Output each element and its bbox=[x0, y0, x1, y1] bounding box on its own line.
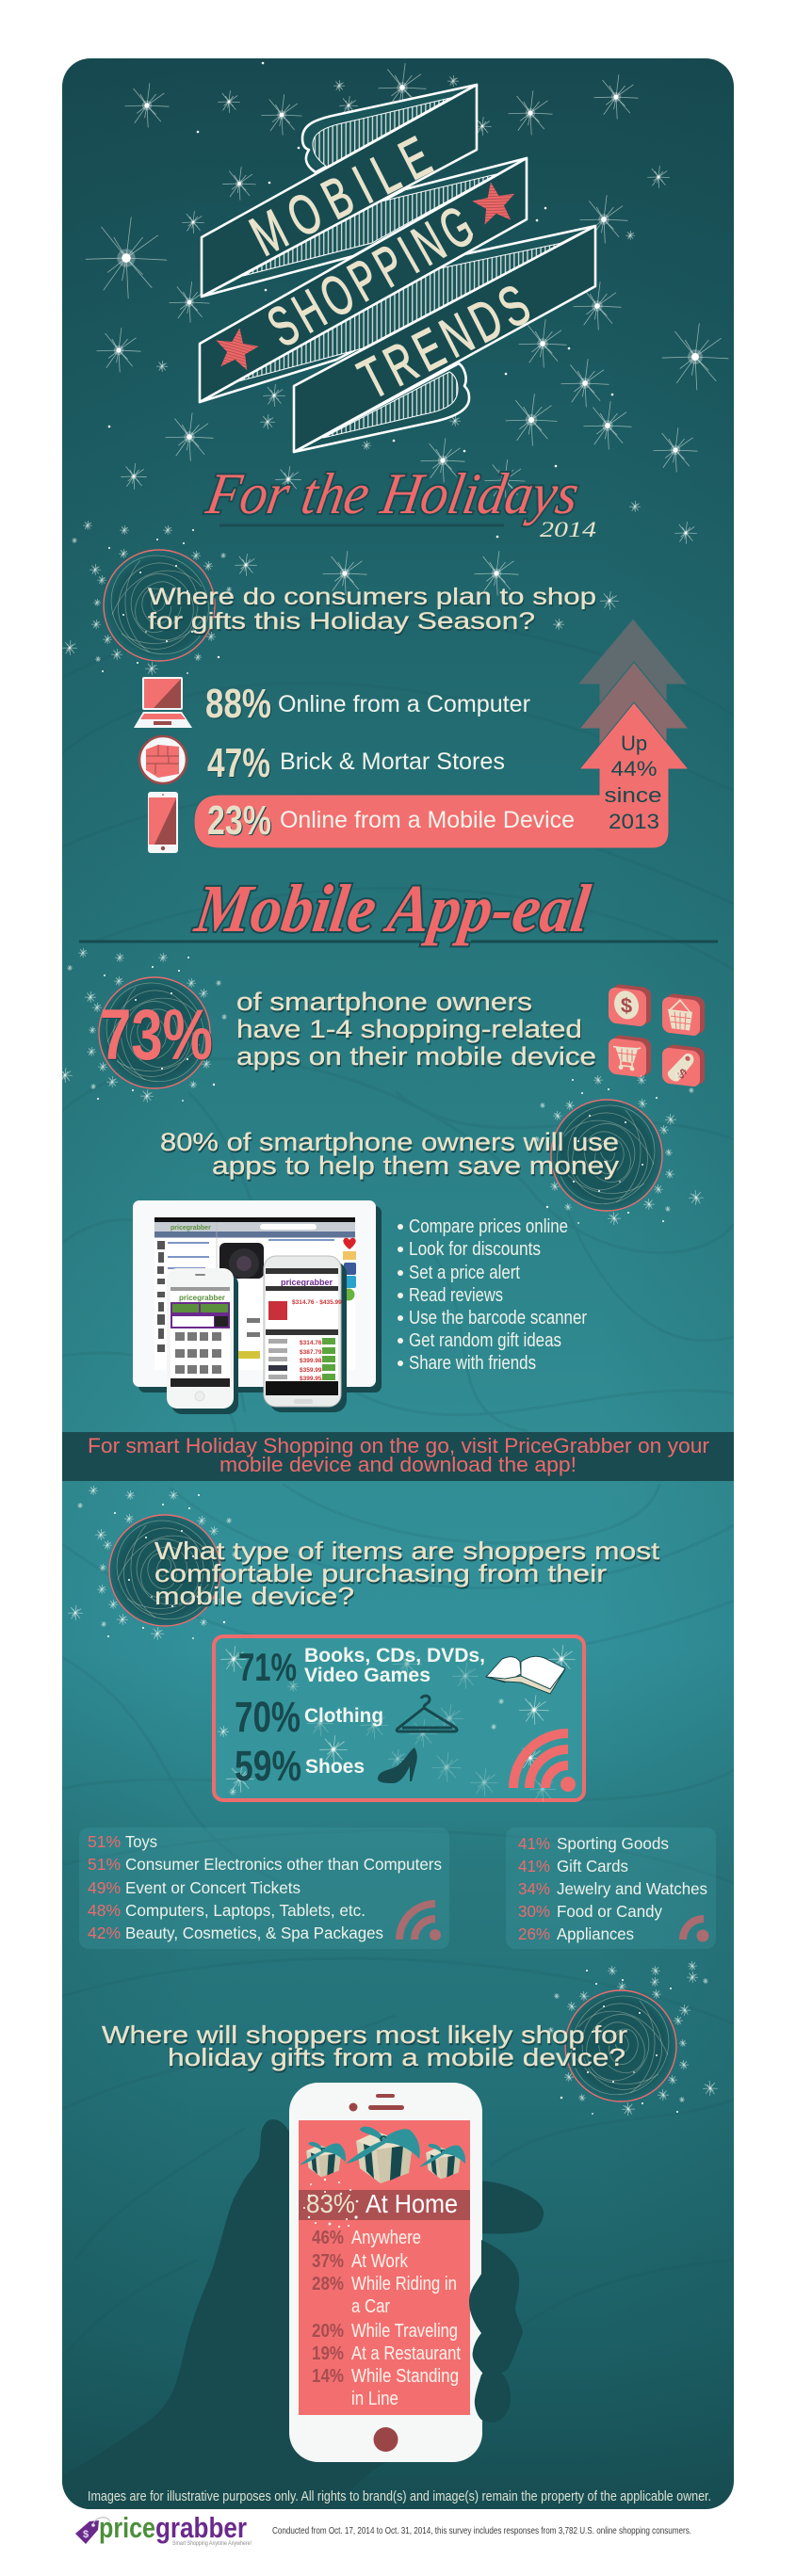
icon: price tag: $ bbox=[674, 1066, 690, 1083]
phone: iphone left: pricegrabber bbox=[179, 1294, 225, 1302]
heading: save money: 80% of smartphone owners will use bbox=[160, 1128, 619, 1156]
panel: left item list bbox=[79, 1827, 449, 1949]
heading: type of items: What type of items are shoppers most bbox=[154, 1537, 660, 1565]
icon: wifi signal bbox=[513, 1733, 572, 1788]
icon: dollar: $ bbox=[621, 993, 632, 1018]
tablet: pricegrabber bbox=[171, 1225, 211, 1232]
list: locations: in Line bbox=[351, 2389, 398, 2409]
icon: open book bbox=[486, 1656, 565, 1694]
icon: laptop bbox=[134, 677, 192, 728]
text: shopping-related apps: apps on their mobile device bbox=[236, 1042, 596, 1071]
band: call to action: For smart Holiday Shopping on the go, visit PriceGrabber on your bbox=[88, 1434, 709, 1457]
icon: mobile phone bbox=[148, 792, 178, 853]
stat: 23% online from a mobile device: 23% bbox=[207, 797, 271, 844]
stat: 47% brick and mortar: Brick & Mortar Stores bbox=[280, 749, 505, 775]
panel: right item list: 41% bbox=[518, 1834, 550, 1853]
icon: bricks bbox=[139, 736, 187, 783]
heading: type of items: mobile device? bbox=[154, 1582, 354, 1610]
stat: 88% online from a computer bbox=[134, 677, 530, 728]
icon: high heel bbox=[378, 1747, 417, 1783]
icons: shopping app buttons bbox=[609, 983, 705, 1088]
stat: 47% brick and mortar bbox=[139, 736, 505, 786]
phone: android right: $314.76 - $435.99 bbox=[292, 1299, 342, 1306]
band: 83% at home bbox=[299, 2179, 470, 2228]
stat: 23% online from a mobile device bbox=[148, 792, 575, 853]
list: locations: 46% bbox=[312, 2228, 344, 2248]
phone: android right: pricegrabber bbox=[281, 1278, 333, 1287]
panel: left item list: Beauty, Cosmetics, & Spa Packages bbox=[125, 1924, 383, 1942]
panel: left item list: 51% bbox=[88, 1832, 121, 1851]
hand silhouette holding phone bbox=[62, 2119, 544, 2509]
icon: price tag: $ bbox=[83, 2529, 89, 2540]
panel: right item list: 30% bbox=[518, 1902, 550, 1921]
icon: price tag bbox=[75, 2518, 110, 2544]
list: app uses bbox=[398, 1216, 587, 1374]
logo: pricegrabber bbox=[75, 2511, 252, 2547]
subtitle: For the Holidays 2014: For the Holidays bbox=[202, 460, 584, 526]
logo: pricegrabber: Smart Shopping Anytime Anywhere! bbox=[172, 2540, 252, 2547]
orb: items question bbox=[68, 1486, 237, 1640]
stat: 71%: 71% bbox=[238, 1645, 297, 1689]
stat: 23% online from a mobile device: Online from a Mobile Device bbox=[280, 807, 575, 833]
phone: android right bbox=[264, 1256, 347, 1412]
list: app uses: Look for discounts bbox=[409, 1239, 541, 1260]
label: books: Books, CDs, DVDs, bbox=[304, 1645, 485, 1666]
list: locations: 37% bbox=[312, 2251, 344, 2272]
heading: where do consumers plan to shop: Where do consumers plan to shop bbox=[148, 584, 596, 610]
stat: 59%: 59% bbox=[235, 1742, 301, 1790]
list: app uses: Read reviews bbox=[409, 1285, 503, 1306]
sparkles in box bbox=[218, 1645, 576, 1802]
list: app uses: Share with friends bbox=[409, 1353, 536, 1374]
label: clothing: Clothing bbox=[304, 1705, 383, 1727]
subtitle: For the Holidays 2014: 2014 bbox=[540, 518, 596, 541]
phone: android right: $387.79 bbox=[300, 1349, 322, 1356]
label: up 44% since 2013: 2013 bbox=[609, 810, 659, 833]
icon: basket bbox=[662, 992, 705, 1038]
panel: right item list: Jewelry and Watches bbox=[557, 1879, 707, 1898]
orb: save money bbox=[534, 1071, 704, 1225]
stat: 47% brick and mortar: 47% bbox=[207, 740, 270, 786]
band: 83% at home: 83% bbox=[306, 2189, 355, 2218]
list: locations bbox=[312, 2228, 461, 2409]
band: 83% at home: At Home bbox=[366, 2189, 458, 2218]
panel: right item list: Food or Candy bbox=[557, 1902, 662, 1921]
stat: 88% online from a computer: 88% bbox=[205, 681, 271, 727]
star: red right bbox=[469, 178, 519, 226]
phone: android right: $314.76 bbox=[300, 1340, 322, 1346]
panel: left item list: 49% bbox=[88, 1878, 121, 1897]
list: locations: While Standing bbox=[351, 2366, 459, 2387]
list: locations: At Work bbox=[351, 2251, 409, 2272]
label: up 44% since 2013: since bbox=[605, 783, 661, 807]
logo: pricegrabber: price bbox=[99, 2511, 155, 2544]
panel: left item list: 42% bbox=[88, 1924, 121, 1942]
stat: 73%: 73% bbox=[100, 995, 213, 1075]
panel: right item list bbox=[506, 1827, 716, 1949]
heading: where will shoppers shop: Where will shoppers most likely shop for bbox=[102, 2021, 627, 2049]
heading: type of items: comfortable purchasing from their bbox=[154, 1559, 607, 1587]
icon: wifi right bbox=[683, 1919, 707, 1940]
star: red left bbox=[213, 325, 261, 371]
list: locations: While Traveling bbox=[351, 2321, 458, 2342]
panel: left item list: Event or Concert Tickets bbox=[125, 1878, 301, 1897]
list: locations: 19% bbox=[312, 2343, 344, 2364]
tablet bbox=[133, 1200, 382, 1393]
stat: 88% online from a computer: Online from a Computer bbox=[278, 691, 530, 717]
stat: 70%: 70% bbox=[235, 1693, 301, 1741]
phone: iphone left bbox=[167, 1268, 238, 1414]
text: shopping-related apps: have 1-4 shopping-related bbox=[236, 1015, 582, 1043]
icon: wifi left bbox=[399, 1904, 439, 1940]
list: app uses: Use the barcode scanner bbox=[409, 1308, 587, 1328]
list: locations: Anywhere bbox=[351, 2228, 421, 2248]
logo: pricegrabber: grabber bbox=[155, 2511, 247, 2544]
heading: Mobile App-eal: Mobile App-eal bbox=[190, 871, 594, 946]
list: locations: a Car bbox=[351, 2296, 390, 2317]
list: locations: At a Restaurant bbox=[351, 2343, 461, 2364]
orb: where will shoppers bbox=[548, 1961, 718, 2116]
orb: first question bbox=[62, 521, 232, 675]
ribbon word: Mobile: MOBILE bbox=[240, 124, 441, 268]
label: shoes: Shoes bbox=[305, 1756, 365, 1778]
starfield sparkles bbox=[86, 62, 728, 1991]
devices: tablet and phones with app screens bbox=[133, 1200, 382, 1414]
panel: right item list: 34% bbox=[518, 1879, 550, 1898]
list: app uses: Set a price alert bbox=[409, 1263, 520, 1283]
orb: 73 percent bbox=[57, 948, 227, 1103]
label: up 44% since 2013: 44% bbox=[610, 757, 658, 781]
title ribbon: Mobile Shopping Trends bbox=[200, 85, 595, 452]
panel: left item list: 51% bbox=[88, 1855, 121, 1874]
panel: left item list: Consumer Electronics other than Computers bbox=[125, 1855, 442, 1874]
ribbon word: Trends: TRENDS bbox=[349, 272, 540, 411]
list: locations: 14% bbox=[312, 2366, 344, 2387]
panel: left item list: Toys bbox=[125, 1832, 157, 1851]
panel: right item list: Sporting Goods bbox=[557, 1834, 669, 1853]
list: app uses: Get random gift ideas bbox=[409, 1330, 561, 1351]
label: up 44% since 2013: Up bbox=[621, 732, 647, 755]
list: app uses: Compare prices online bbox=[409, 1216, 568, 1237]
phone: android right: $359.99 bbox=[300, 1367, 322, 1374]
phone: android right: $399.98 bbox=[300, 1358, 322, 1364]
panel: top purchased items bbox=[214, 1636, 584, 1802]
arrows: growth arrow stack bbox=[194, 619, 689, 848]
icon: hanger bbox=[397, 1696, 457, 1731]
text: shopping-related apps: of smartphone owners bbox=[236, 988, 532, 1016]
list: locations: While Riding in bbox=[351, 2274, 457, 2294]
ribbon word: Shopping: SHOPPING bbox=[257, 194, 484, 360]
panel: left item list: 48% bbox=[88, 1901, 121, 1920]
band: call to action bbox=[62, 1432, 734, 1481]
heading: save money: apps to help them save money bbox=[212, 1151, 620, 1180]
panel: right item list: Gift Cards bbox=[557, 1857, 628, 1876]
label: books: Video Games bbox=[304, 1665, 430, 1686]
phone: android right: $399.95 bbox=[300, 1376, 322, 1382]
panel: left item list: Computers, Laptops, Tablets, etc. bbox=[125, 1901, 366, 1920]
list: locations: 20% bbox=[312, 2321, 344, 2342]
panel: right item list: 41% bbox=[518, 1857, 550, 1876]
icon: cart bbox=[609, 1034, 651, 1079]
panel: right item list: Appliances bbox=[557, 1924, 634, 1943]
phone: large smartphone bbox=[289, 2083, 482, 2462]
band: call to action: mobile device and download the app! bbox=[219, 1453, 577, 1476]
list: locations: 28% bbox=[312, 2274, 344, 2294]
heading: where do consumers plan to shop: for gifts this Holiday Season? bbox=[148, 608, 535, 635]
heading: where will shoppers shop: holiday gifts from a mobile device? bbox=[168, 2043, 625, 2071]
hand fingers over phone bbox=[469, 2240, 523, 2423]
panel: right item list: 26% bbox=[518, 1924, 550, 1943]
gifts: three presents bbox=[300, 2127, 465, 2183]
